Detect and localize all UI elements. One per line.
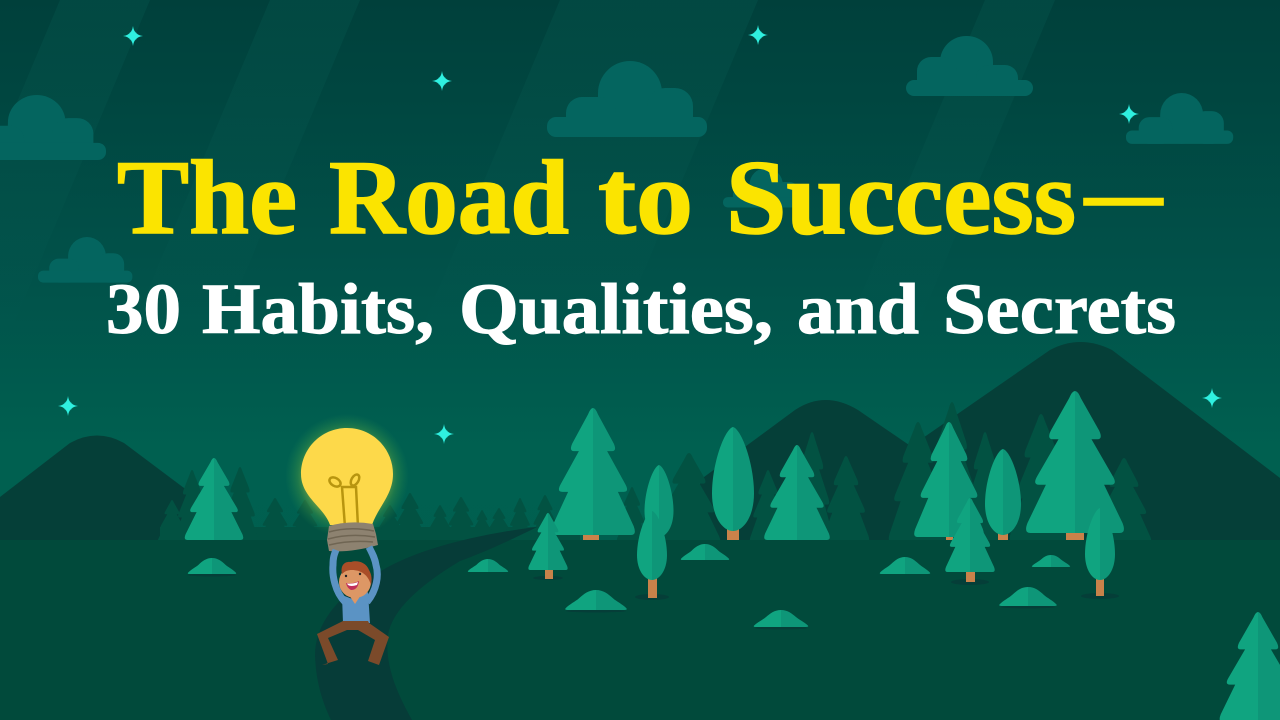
- light bulb: [285, 414, 409, 551]
- title line 1: Success: [726, 139, 1076, 256]
- foreground pine trees: [185, 391, 1280, 720]
- background forest: [158, 402, 1151, 545]
- title line 2: Habits,: [202, 268, 434, 349]
- ground: [0, 540, 1280, 720]
- title line 2: Qualities,: [459, 268, 773, 349]
- title line 1: Road: [329, 139, 569, 256]
- clouds: [0, 36, 1233, 283]
- title line 1: [117, 139, 1163, 256]
- title line 1: to: [598, 139, 693, 256]
- light rays: [0, 0, 1055, 340]
- cypress trees: [637, 427, 1115, 598]
- character holding the bulb: [317, 547, 389, 668]
- night sky background: [0, 0, 1280, 560]
- title line 1: —: [1084, 150, 1163, 237]
- tree shadows: [188, 574, 1119, 630]
- title line 2: [106, 268, 1176, 349]
- title line 1: The: [117, 139, 297, 256]
- bushes: [188, 544, 1070, 627]
- mountains: [0, 342, 1280, 545]
- winding road: [315, 527, 537, 720]
- title line 2: 30: [106, 268, 181, 349]
- title line 2: and: [797, 268, 919, 349]
- stars: [58, 25, 1222, 444]
- title line 2: Secrets: [943, 268, 1176, 349]
